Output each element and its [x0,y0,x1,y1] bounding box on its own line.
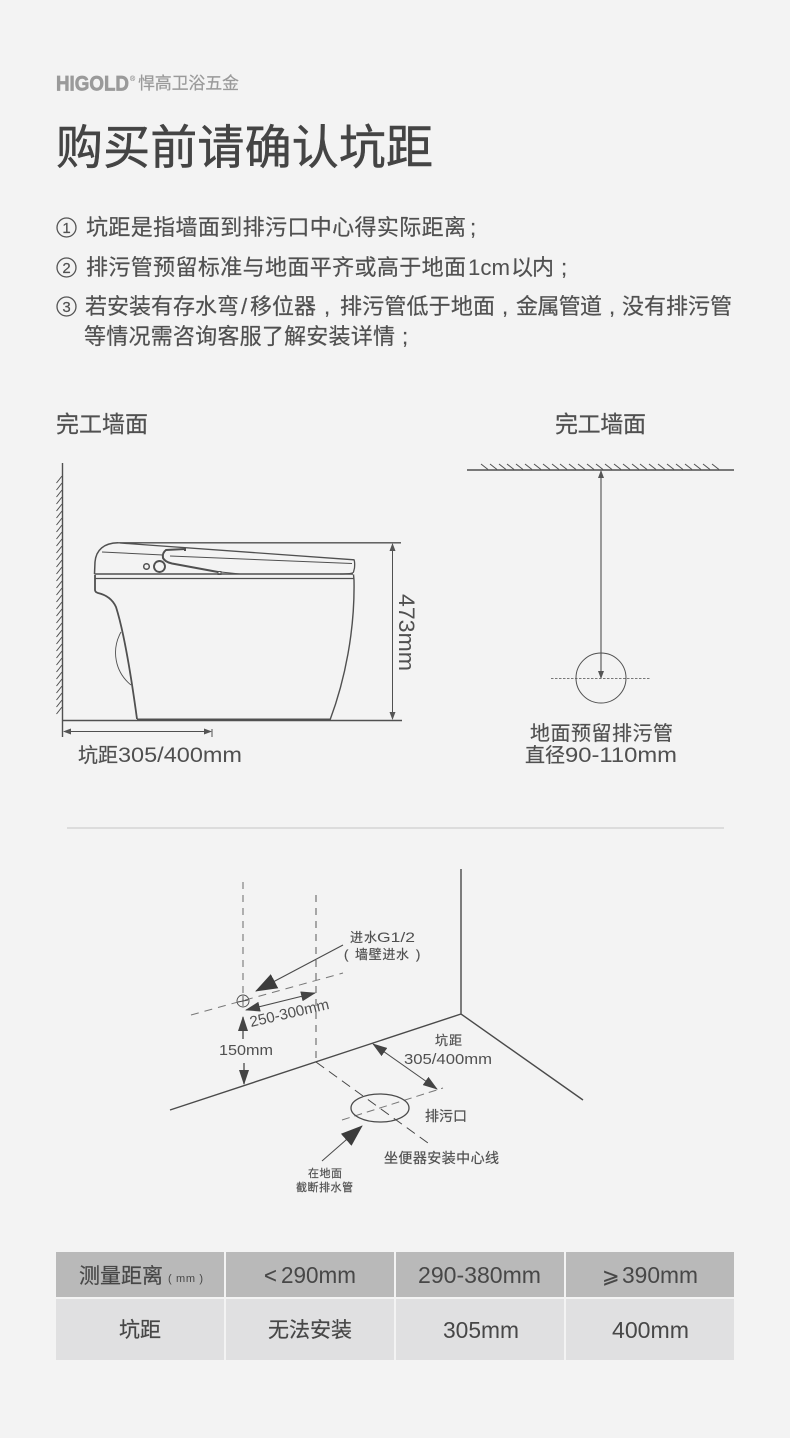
note 3: / [241,294,248,319]
note 3: , [502,294,508,319]
table body row: 305mm [443,1317,519,1343]
floor line [63,720,402,722]
table header row: ⩾ [602,1260,620,1290]
table header row: 测量距离 [79,1265,163,1288]
150mm arrows [242,1017,244,1039]
pit distance label: 305/400mm [118,744,242,767]
centre arrow [600,471,602,678]
ceiling wall line with hatching [467,464,734,470]
installation perspective diagram [170,869,583,1161]
note 2: 2 [62,260,71,277]
left heading: 完工墙面 [56,411,148,437]
note 3: 没有排污管 [622,294,732,319]
note 3: 若安装有存水弯 [85,294,239,319]
drain pipe label [525,722,677,767]
top view diagram [467,464,734,703]
pit distance arrow [373,1044,437,1089]
note 3: , [609,294,615,319]
inlet label: ( [344,947,349,962]
inlet label [344,929,420,962]
table header row: 290mm [281,1262,356,1288]
table body row: 无法安装 [268,1319,352,1342]
note 3: 移位器 [250,294,316,319]
height dimension [392,544,394,719]
note 1: ; [470,215,476,240]
note 1: 坑距是指墙面到排污口中心得实际距离 [86,215,466,240]
water inlet circle [237,995,249,1007]
brand logo: HIGOLD [56,72,129,96]
notes list [57,215,732,349]
inlet label: 进水 [350,930,377,945]
table header row: 290-380mm [418,1262,541,1288]
note 2: 1cm [468,255,510,280]
right heading: 完工墙面 [555,411,646,437]
note 1: 1 [62,220,71,237]
drain pipe label: 直径 [525,744,565,767]
size table [56,1252,734,1360]
note 2: ; [561,255,567,280]
pit distance label [78,744,242,767]
note 3: 排污管低于地面 [340,294,495,319]
note 3: 等情况需咨询客服了解安装详情 [84,324,395,349]
table header row: 390mm [622,1262,698,1288]
drain label: 排污口 [425,1108,467,1124]
inlet label: G1/2 [377,929,415,945]
note 2: 排污管预留标准与地面平齐或高于地面 [86,255,466,280]
inlet label: ) [416,947,420,962]
cut pipe label: 截断排水管 [296,1180,353,1194]
pit distance label: 坑距 [435,1033,462,1048]
table body row [56,1299,734,1360]
drain circle [576,653,626,703]
150mm label: 150mm [219,1042,273,1059]
note 3: ; [402,324,408,349]
table body row: 坑距 [119,1319,161,1342]
dashed centre line [551,678,651,680]
note 3 [57,294,732,349]
drain pipe label: 90-110mm [565,744,677,767]
note 3: 3 [62,299,71,316]
height label: 473mm [394,594,419,671]
table header row: ( mm ) [168,1273,203,1285]
note 3: , [324,294,330,319]
side view diagram [56,463,402,737]
drain ellipse [351,1094,409,1122]
table header row: < [264,1263,277,1288]
title: 购买前请确认坑距 [56,121,433,174]
pit distance label [404,1033,492,1068]
toilet outline [94,543,401,720]
inlet label: 墙壁进水 [355,947,409,962]
cut pipe label: 在地面 [308,1167,342,1180]
table body row: 400mm [612,1317,689,1343]
wall with hatching [56,463,62,737]
250-300mm label: 250-300mm [248,996,331,1031]
table header row [56,1252,734,1297]
cut pipe arrow [322,1126,362,1161]
dashed guides [242,882,244,1010]
pit distance label: 坑距 [78,744,118,767]
drain pipe label: 地面预留排污管 [530,722,673,745]
brand logo: ® [130,75,136,83]
note 2: 以内 [511,255,554,280]
pit distance label: 305/400mm [404,1051,492,1068]
250-300 dimension arrow [246,993,315,1010]
brand logo [56,72,239,96]
brand logo: 悍高卫浴五金 [138,74,239,93]
room corner lines [170,869,583,1110]
pit distance dimension [64,729,212,737]
section divider [67,827,724,829]
inlet arrow [256,945,343,991]
cut pipe label [296,1167,353,1194]
centre line label: 坐便器安装中心线 [384,1150,499,1166]
note 3: 金属管道 [516,294,602,319]
